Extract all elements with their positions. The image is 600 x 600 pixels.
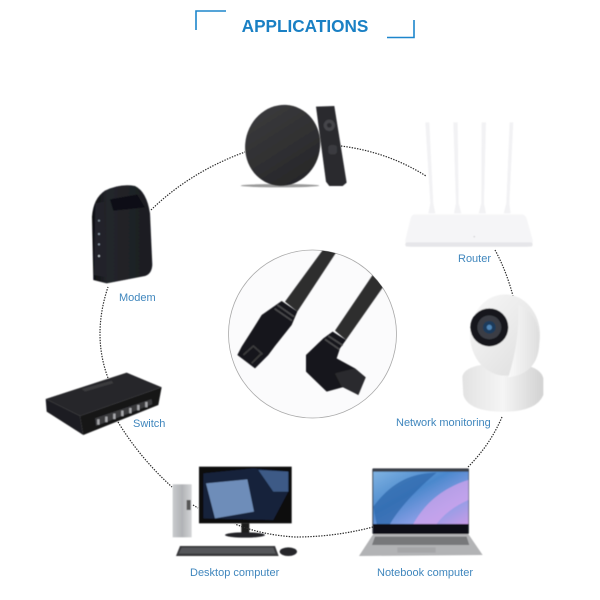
cables and connectors (237, 248, 383, 395)
connection: dotted ring (100, 146, 513, 537)
keyboard (176, 546, 279, 556)
right plug head (335, 368, 366, 395)
side panel (508, 305, 539, 377)
ports (95, 399, 152, 426)
disc (236, 96, 329, 194)
front face (80, 387, 162, 435)
right plug ribs (325, 336, 343, 349)
icon: modem (92, 185, 152, 283)
antennas (425, 122, 513, 213)
heading: APPLICATIONS (242, 16, 368, 36)
label: Switch: Switch (133, 418, 165, 430)
left cable (285, 248, 337, 312)
label: Desktop computer: Desktop computer (190, 567, 280, 579)
monitor (199, 467, 292, 538)
label: Modem: Modem (119, 292, 156, 304)
tower (173, 484, 192, 537)
LED strip (82, 381, 113, 392)
right cable (335, 275, 383, 340)
label: Network monitoring: Network monitoring (396, 417, 491, 429)
left plug ribs (275, 305, 294, 321)
circle outline (228, 250, 396, 418)
body (405, 214, 533, 247)
icon: desktop computer (173, 467, 297, 556)
icon: router (405, 122, 533, 247)
title (196, 11, 414, 38)
right connector (306, 332, 366, 395)
label: Notebook computer: Notebook computer (377, 567, 473, 579)
left connector (237, 301, 297, 368)
mouse (280, 547, 297, 556)
icon: notebook computer (359, 468, 483, 556)
remote (316, 106, 347, 186)
bracket: top left (196, 11, 226, 30)
bracket: bottom right (387, 20, 414, 38)
icon: TV box and remote (236, 96, 347, 194)
label: Router: Router (458, 253, 491, 265)
left face (46, 399, 83, 435)
base (462, 363, 543, 412)
head (470, 294, 540, 376)
icon: network camera (462, 294, 543, 412)
panel: cable photo (228, 248, 396, 418)
icon: network switch (46, 373, 162, 435)
lens (470, 308, 508, 346)
top face (46, 373, 162, 416)
shadow (241, 184, 319, 187)
left plug opening (243, 346, 263, 363)
